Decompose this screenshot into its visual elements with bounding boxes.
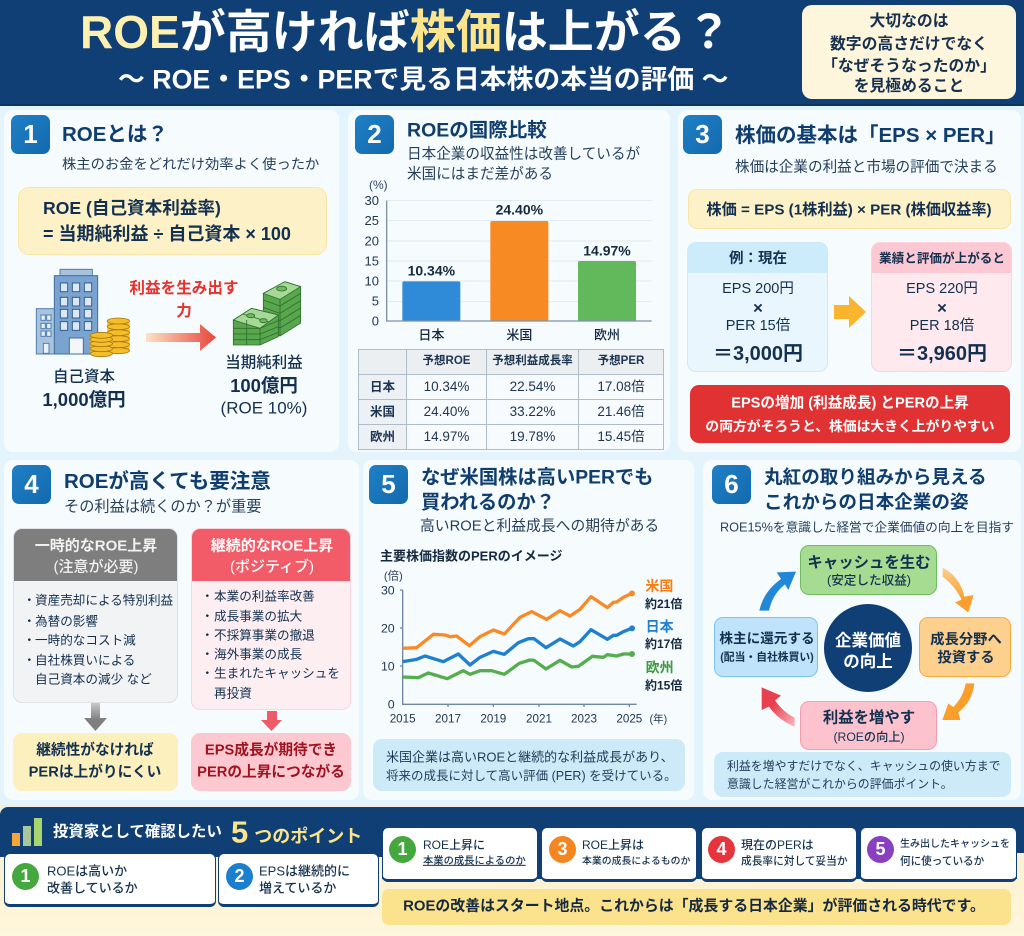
callout: key message: 数字の高さだけでなく [830, 36, 988, 53]
example: improved: EPS 220円 [906, 281, 978, 297]
subheading 3: 株価は企業の利益と市場の評価で決まる [735, 160, 998, 176]
title: ROEが高ければ株価は上がる？ [80, 6, 732, 58]
bar chart: ROE: 30 [365, 193, 379, 208]
subheading 4: その利益は続くのか？が重要 [64, 498, 261, 515]
cycle step: return: (配当・自社株買い) [720, 652, 814, 664]
note box 5 [373, 739, 685, 791]
label: equity: 1,000億円 [42, 389, 126, 410]
continuous ROE rise box: 再投資 [214, 687, 252, 701]
data table: 15.45倍 [597, 429, 645, 444]
heading 5 [421, 466, 653, 513]
line chart: PER: 米国 [645, 578, 673, 594]
line chart: PER: 約17倍 [645, 636, 682, 651]
data table: 21.46倍 [597, 404, 645, 419]
example: current: 例：現在 [729, 251, 787, 267]
cycle step: cash: キャッシュを生む [807, 554, 931, 571]
continuous ROE rise box: 海外事業の成長 [214, 648, 302, 662]
bar chart: ROE: 米国 [506, 328, 532, 343]
line chart: PER [381, 569, 682, 725]
continuous ROE rise box: (ポジティブ) [230, 558, 314, 576]
callout: key message: 「なぜそうなったのか」 [822, 58, 996, 75]
badge 4: 4 [24, 469, 39, 499]
data table: 24.40% [424, 404, 469, 419]
continuous ROE rise box [191, 528, 351, 710]
outcome: continuous: PERの上昇につながる [197, 765, 345, 781]
band heading highlight: 5 つのポイント [231, 814, 362, 850]
cycle step: cash [800, 545, 937, 595]
number 1 top [389, 836, 416, 863]
heading 6: 丸紅の取り組みから見える [764, 467, 987, 488]
top card 3: ROE上昇は [582, 838, 644, 852]
bar chart: ROE: 日本 [418, 328, 444, 343]
line chart title: 主要株価指数のPERのイメージ [380, 548, 562, 564]
point card 1: 改善しているか [47, 880, 138, 896]
continuous ROE rise box: ・ [201, 667, 214, 681]
data table: 欧州 [370, 430, 395, 444]
number 3 [549, 836, 576, 863]
example: current: × [753, 298, 763, 318]
subheading 6: ROE15%を意識した経営で企業価値の向上を目指す [720, 521, 1014, 535]
temporary ROE rise box: 自社株買いによる [35, 654, 135, 668]
top card 1: ROE上昇に [423, 838, 485, 852]
center circle: の向上 [843, 653, 893, 671]
top card 5: 生み出したキャッシュを [900, 839, 1010, 850]
example: improved: 業績と評価が上がると [879, 252, 1005, 266]
stock price formula: 株価 = EPS (1株利益) × PER (株価収益率) [706, 201, 992, 218]
bar chart: ROE [365, 178, 652, 343]
example: current [687, 242, 828, 372]
top card 3: 本業の成長によるものか [582, 856, 690, 867]
outcome: temporary: 継続性がなければ [36, 743, 154, 759]
callout: key message: 大切なのは [870, 13, 948, 30]
bar chart: ROE: 5 [372, 294, 379, 309]
badge 1 [11, 115, 50, 154]
example: current: PER 15倍 [726, 318, 790, 334]
subheading 2 [407, 146, 640, 183]
temporary ROE rise box: 一時的なROE上昇 [35, 538, 157, 554]
band heading: 投資家として確認したい [53, 823, 222, 840]
data table: 14.97% [424, 429, 469, 444]
line chart: PER: 約15倍 [645, 677, 682, 692]
cycle step: profit: (ROEの向上) [833, 730, 905, 744]
arrow: gray down [84, 703, 107, 731]
callout: key message: を見極めること [854, 78, 964, 95]
number 5 [867, 836, 894, 863]
heading 3: 株価の基本は「EPS × PER」 [735, 124, 1006, 147]
cycle step: return [714, 617, 818, 677]
label: net income: 当期純利益 [225, 354, 303, 371]
data table: 17.08倍 [597, 379, 645, 394]
note box 6: 利益を増やすだけでなく、キャッシュの使い方まで [727, 759, 1000, 773]
line chart: PER: (倍) [384, 569, 403, 582]
label: 利益を生み出す力: 力 [176, 303, 192, 320]
badge 3: 3 [695, 119, 710, 149]
continuous ROE rise box: ・ [201, 648, 214, 662]
example: current: ＝3,000円 [713, 343, 803, 365]
line chart: PER: 0 [388, 698, 395, 712]
label: net income [221, 354, 307, 418]
outcome: temporary: PERは上がりにくい [29, 765, 161, 781]
temporary ROE rise box [13, 528, 178, 703]
center circle: 企業価値 [835, 632, 901, 650]
line chart: PER: 2021 [526, 712, 552, 725]
data table: 予想PER [598, 355, 644, 367]
continuous ROE rise box: 本業の利益率改善 [214, 590, 315, 604]
heading 5: 買われるのか？ [421, 492, 555, 513]
cycle step: profit: 利益を増やす [823, 709, 915, 726]
note box 6: 意識した経営がこれからの評価ポイント。 [727, 777, 953, 791]
bar chart: ROE: (%) [369, 178, 388, 192]
note box 6 [714, 752, 1011, 797]
subtitle: ～ ROE・EPS・PERで見る日本株の本当の評価 ～ [118, 65, 728, 95]
bar chart: ROE: 14.97% [583, 242, 631, 258]
line chart: PER: 30 [381, 583, 395, 597]
temporary ROE rise box: (注意が必要) [54, 558, 138, 576]
cycle step: invest [919, 617, 1011, 677]
number 2 [226, 863, 253, 890]
continuous ROE rise box: 継続的なROE上昇 [211, 538, 333, 554]
line chart: PER: 2019 [480, 712, 506, 725]
panel 2: 国際比較 [348, 110, 670, 452]
example: improved [871, 242, 1012, 372]
data table: 予想利益成長率 [492, 355, 573, 367]
number 3: 3 [557, 839, 568, 859]
number 1 top: 1 [397, 839, 408, 859]
arrow: equity to profit [146, 324, 216, 351]
data table: 予想ROE [423, 355, 470, 367]
line chart: PER: 2025 [616, 712, 642, 725]
heading 1: ROEとは？ [62, 123, 168, 146]
badge 6 [712, 465, 751, 504]
temporary ROE rise box: 一時的なコスト減 [35, 634, 136, 648]
cycle arrows [759, 568, 974, 726]
bar chart: ROE: 10.34% [408, 262, 456, 278]
arrow: current to improved [834, 296, 866, 328]
label: 利益を生み出す力: 利益を生み出す [129, 280, 239, 297]
badge 5: 5 [381, 469, 396, 499]
ROE formula box: ROE (自己資本利益率) [43, 198, 221, 218]
top card 3 [541, 827, 697, 882]
navy band right [382, 807, 1024, 879]
data table: 米国 [370, 405, 395, 419]
label: equity [42, 368, 126, 410]
header banner [0, 0, 1024, 106]
cycle step: profit [800, 701, 937, 750]
data table [358, 349, 664, 450]
data table: 日本 [370, 380, 395, 394]
badge 2: 2 [367, 119, 382, 149]
data table: 19.78% [510, 429, 555, 444]
label: 利益を生み出す力 [129, 280, 239, 320]
number 4 [708, 836, 735, 863]
heading 6: これからの日本企業の姿 [764, 492, 969, 513]
continuous ROE rise box: ・ [201, 590, 214, 604]
icon: rising bars [12, 818, 42, 846]
example: improved: PER 18倍 [910, 318, 974, 334]
heading 2: ROEの国際比較 [407, 119, 547, 141]
bottom section: investor points [0, 805, 1024, 936]
line chart: PER: 欧州 [646, 659, 674, 675]
icon: cash stacks [232, 281, 302, 346]
label: net income: 100億円 [230, 375, 298, 396]
top card 4: 現在のPERは [741, 838, 814, 852]
top card 4 [701, 827, 857, 882]
closing message bar [382, 889, 1011, 925]
label: equity: 自己資本 [53, 368, 115, 385]
temporary ROE rise box: 自己資本の減少 など [35, 673, 152, 687]
center circle [824, 604, 912, 692]
point card 2 [218, 853, 379, 907]
heading 4: ROEが高くても要注意 [64, 470, 271, 493]
note box 5: 将来の成長に対して高い評価 (PER) を受けている。 [386, 769, 677, 783]
number 5: 5 [875, 839, 886, 859]
data table: 22.54% [510, 379, 555, 394]
continuous ROE rise box: ・ [201, 610, 214, 624]
continuous ROE rise box: 生まれたキャッシュを [214, 667, 340, 681]
temporary ROE rise box: ・ [23, 654, 36, 668]
icon: building and coins [36, 268, 130, 358]
point card 2: 増えているか [259, 880, 336, 896]
outcome: continuous: EPS成長が期待でき [205, 743, 337, 759]
bar chart: ROE: 15 [365, 253, 379, 268]
bar chart: ROE: 10 [365, 273, 379, 288]
stock price formula [688, 189, 1011, 229]
panel 4: 要注意 [4, 460, 359, 800]
bar chart: ROE: 0 [372, 313, 379, 328]
top card 1 [382, 827, 538, 882]
badge 4 [12, 465, 51, 504]
subheading 2: 米国にはまだ差がある [407, 167, 553, 183]
top card 4: 成長率に対して妥当か [741, 856, 848, 868]
heading 5: なぜ米国株は高いPERでも [421, 467, 653, 488]
top card 1: 本業の成長によるのか [423, 856, 526, 867]
line chart: PER: 2015 [390, 712, 416, 725]
continuous ROE rise box: ・ [201, 629, 214, 643]
bar chart: ROE: 24.40% [496, 202, 544, 218]
panel 1: ROEとは [4, 110, 339, 452]
subheading 1: 株主のお金をどれだけ効率よく使ったか [62, 157, 319, 173]
arrow: red down [261, 711, 282, 731]
subheading 2: 日本企業の収益性は改善しているが [407, 147, 640, 163]
cycle step: return: 株主に還元する [719, 631, 815, 646]
line chart: PER: 2023 [571, 712, 597, 725]
number 1: 1 [20, 866, 30, 886]
continuous ROE rise box: 不採算事業の撤退 [214, 629, 315, 643]
outcome: temporary [13, 733, 178, 791]
point card 1: ROEは高いか [47, 864, 127, 878]
panel 3: EPS × PER [678, 110, 1021, 452]
line chart: PER: 約21倍 [645, 596, 682, 611]
outcome: continuous [191, 733, 351, 791]
ROE formula box: = 当期純利益 ÷ 自己資本 × 100 [43, 224, 291, 244]
point card 1 [4, 853, 216, 907]
temporary ROE rise box: ・ [23, 615, 36, 629]
bar chart: ROE: 欧州 [594, 328, 620, 343]
example: improved: × [937, 298, 947, 318]
cycle step: cash: (安定した収益) [827, 574, 911, 588]
data table: 33.22% [510, 404, 555, 419]
point card 2: EPSは継続的に [259, 864, 350, 878]
line chart: PER: 日本 [646, 619, 674, 635]
example: improved: ＝3,960円 [897, 343, 987, 365]
panel 5: 高いPER [363, 460, 694, 800]
number 1 [12, 863, 39, 890]
example: current: EPS 200円 [722, 281, 794, 297]
ROE formula box [18, 187, 327, 255]
data table: 10.34% [424, 379, 469, 394]
line chart: PER: (年) [649, 712, 667, 725]
line chart: PER: 10 [381, 659, 395, 673]
continuous ROE rise box: 成長事業の拡大 [214, 610, 302, 624]
line chart: PER: 20 [381, 621, 395, 635]
temporary ROE rise box: ・ [23, 634, 36, 648]
temporary ROE rise box: ・ [23, 594, 36, 608]
subheading 5: 高いROEと利益成長への期待がある [420, 519, 659, 535]
red conclusion box: の両方がそろうと、株価は大きく上がりやすい [705, 419, 995, 434]
line chart: PER: 2017 [435, 712, 461, 725]
note box 5: 米国企業は高いROEと継続的な利益成長があり、 [386, 750, 674, 764]
label: net income: (ROE 10%) [221, 398, 307, 418]
temporary ROE rise box: 資産売却による特別利益 [35, 594, 173, 608]
number 2: 2 [234, 866, 244, 886]
heading 6 [764, 467, 987, 513]
temporary ROE rise box: 為替の影響 [35, 615, 98, 629]
badge 1: 1 [23, 119, 38, 149]
callout: key message [802, 5, 1016, 99]
cycle step: invest: 投資する [937, 650, 995, 666]
number 4: 4 [716, 839, 726, 859]
closing message bar: ROEの改善はスタート地点。これからは「成長する日本企業」が評価される時代です。 [403, 899, 985, 915]
red conclusion box: EPSの増加 (利益成長) とPERの上昇 [731, 396, 969, 412]
bar chart: ROE: 20 [365, 233, 379, 248]
navy band [0, 807, 382, 857]
red conclusion box [690, 385, 1010, 443]
badge 3 [683, 115, 722, 154]
cycle step: invest: 成長分野へ [930, 632, 1002, 648]
bar chart: ROE: 25 [365, 213, 379, 228]
badge 2 [355, 115, 394, 154]
badge 6: 6 [724, 469, 739, 499]
top card 5: 何に使っているか [900, 856, 984, 868]
top card 5 [860, 827, 1017, 882]
badge 5 [369, 465, 408, 504]
panel 6: 丸紅 [703, 460, 1021, 800]
